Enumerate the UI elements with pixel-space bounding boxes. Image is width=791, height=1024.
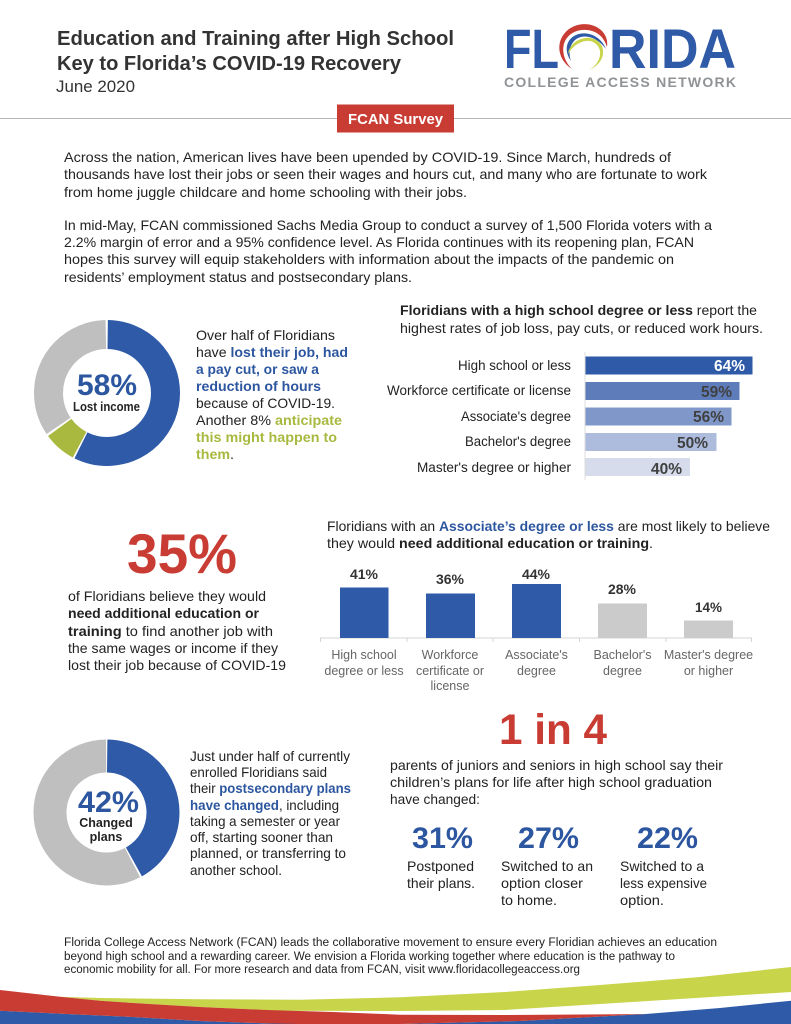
column: associate's 44%: degree	[517, 664, 556, 678]
heading: need for additional education: they would need additional education or training .	[327, 535, 653, 551]
horizontal bar chart: job loss by education	[387, 352, 752, 480]
text: over half of Floridians: have lost their job, had	[196, 344, 348, 360]
column: bachelor's 28%	[594, 581, 651, 678]
column: workforce 36%: Workforce	[422, 648, 478, 662]
bar: master's degree 40%	[417, 458, 690, 478]
column: master's 14%	[664, 599, 753, 678]
donut chart: 42% changed plans: 42%	[78, 786, 139, 819]
stat: 22% less expensive	[620, 822, 707, 908]
footer swoosh	[0, 967, 791, 1024]
stat: 31% postponed: 31%	[412, 822, 473, 855]
bar: associate's degree 56%: 56%	[693, 409, 724, 426]
bar: high school or less 64%: High school or less	[458, 358, 571, 373]
column: associate's 44%: Associate's	[505, 648, 568, 662]
bar: bachelor's degree 50%	[465, 433, 716, 452]
stat: 22% less expensive: 22%	[637, 822, 698, 855]
column chart: need for additional education	[320, 566, 753, 693]
column: master's 14%: Master's degree	[664, 648, 753, 662]
column: high school 41%: degree or less	[324, 664, 404, 678]
bar: master's degree 40%: 40%	[651, 461, 682, 478]
stat: 27% closer to home: 27%	[518, 822, 579, 855]
column: high school 41%: 41%	[350, 566, 379, 582]
badge: FCAN Survey	[337, 104, 454, 132]
stat: 22% less expensive: less expensive	[620, 875, 707, 891]
stat: 35%: 35%	[127, 522, 237, 585]
heading: job loss by education: highest rates of job loss, pay cuts, or reduced work hours.	[400, 320, 763, 336]
text: 35% description: lost their job because of COVID-19	[68, 657, 286, 673]
bar: associate's degree 56%	[461, 408, 732, 426]
donut chart: 58% lost income: 58%	[77, 369, 137, 402]
intro paragraph 2	[64, 217, 712, 285]
donut chart: 58% lost income: Lost income	[73, 400, 140, 414]
stat: 31% postponed	[407, 822, 475, 891]
column: workforce 36%: certificate or	[416, 664, 484, 678]
donut chart: 42% changed plans	[50, 756, 163, 869]
title: Key to Florida’s COVID-19 Recovery	[57, 53, 402, 75]
bar: high school or less 64%: 64%	[714, 358, 745, 375]
column: high school 41%	[324, 566, 404, 678]
column: high school 41%: High school	[331, 648, 397, 662]
text: parents of juniors and seniors: children’s plans for life after high school graduation	[390, 774, 712, 790]
logo: Florida College Access Network: COLLEGE ACCESS NETWORK	[504, 74, 736, 90]
text: postsecondary plans: planned, or transferring to	[190, 845, 346, 861]
bar: workforce certificate 59%	[387, 382, 740, 401]
bar: workforce certificate 59%: Workforce certificate or license	[387, 383, 571, 398]
text: postsecondary plans: enrolled Floridians said	[190, 764, 327, 780]
text: postsecondary plans: their postsecondary plans	[190, 780, 351, 796]
bar: bachelor's degree 50%: Bachelor's degree	[465, 434, 571, 449]
text: postsecondary plans: taking a semester or year	[190, 813, 340, 829]
text: postsecondary plans: have changed, including	[190, 797, 339, 813]
intro paragraph 1: thousands have lost their jobs or seen their wages and hours cut, and many who are fortunate to work	[64, 166, 708, 182]
logo: Florida College Access Network: FL	[504, 17, 559, 80]
heading: job loss by education: Floridians with a high school degree or less report the	[400, 302, 757, 318]
intro paragraph 1	[64, 149, 708, 200]
column: associate's 44%: 44%	[522, 566, 551, 582]
stat: 27% closer to home: option closer	[501, 875, 583, 891]
column: bachelor's 28%: 28%	[608, 581, 637, 597]
title: Education and Training after High School	[57, 28, 454, 50]
intro paragraph 2: residents’ employment status and postsecondary plans.	[64, 269, 412, 285]
bar: associate's degree 56%: Associate's degree	[461, 409, 571, 424]
intro paragraph 1: Across the nation, American lives have been upended by COVID-19. Since March, hundreds of	[64, 149, 671, 165]
intro paragraph 2: In mid-May, FCAN commissioned Sachs Media Group to conduct a survey of 1,500 Florida voters with a	[64, 217, 712, 233]
bar: bachelor's degree 50%: 50%	[677, 435, 708, 452]
title: June 2020	[56, 77, 135, 96]
text: over half of Floridians: this might happen to	[196, 429, 337, 445]
column: bachelor's 28%: degree	[603, 664, 642, 678]
bar: workforce certificate 59%: 59%	[701, 384, 732, 401]
donut chart: 58% lost income	[48, 334, 166, 452]
column: workforce 36%: license	[431, 679, 469, 693]
donut chart: 42% changed plans: plans	[90, 830, 122, 844]
text: postsecondary plans: Just under half of currently	[190, 748, 350, 764]
column: workforce 36%: 36%	[436, 571, 465, 587]
text: 35% description: need additional education or	[68, 605, 260, 621]
text: over half of Floridians: reduction of hours	[196, 378, 321, 394]
text: over half of Floridians: them.	[196, 446, 234, 462]
logo: Florida College Access Network: RIDA	[609, 17, 736, 80]
column: master's 14%: or higher	[684, 664, 733, 678]
footer text: beyond high school and a rewarding career. We envision a Florida working together where education is the pathway to	[64, 951, 675, 963]
column: associate's 44%	[505, 566, 568, 678]
heading: need for additional education	[327, 518, 770, 551]
stat: 31% postponed: their plans.	[407, 875, 475, 891]
stat: 27% closer to home: Switched to an	[501, 858, 593, 874]
heading: job loss by education	[400, 302, 763, 336]
stat: 27% closer to home: to home.	[501, 892, 557, 908]
stat: 22% less expensive: Switched to a	[620, 858, 704, 874]
column: master's 14%: 14%	[695, 599, 723, 615]
column: workforce 36%	[416, 571, 484, 693]
text: parents of juniors and seniors: have changed:	[390, 791, 480, 807]
donut chart: 42% changed plans: Changed	[79, 816, 133, 830]
text: over half of Floridians: Over half of Floridians	[196, 327, 335, 343]
bar: master's degree 40%: Master's degree or higher	[417, 460, 572, 475]
text: postsecondary plans	[190, 748, 351, 878]
footer text: Florida College Access Network (FCAN) leads the collaborative movement to ensure every Floridian achieves an education	[64, 937, 717, 949]
text: over half of Floridians: Another 8% anticipate	[196, 412, 342, 428]
text: postsecondary plans: off, starting sooner than	[190, 829, 333, 845]
text: 35% description	[68, 588, 286, 673]
stat: 1 in 4: 1 in 4	[499, 706, 607, 754]
footer text	[64, 937, 717, 976]
text: over half of Floridians: because of COVID-19.	[196, 395, 335, 411]
intro paragraph 2: hopes this survey will equip stakeholders with information about the impacts of the pandemic on	[64, 251, 674, 267]
stat: 22% less expensive: option.	[620, 892, 664, 908]
stat: 31% postponed: Postponed	[407, 858, 474, 874]
intro paragraph 2: 2.2% margin of error and a 95% confidence level. As Florida continues with its reopening plan, FCAN	[64, 234, 694, 250]
text: over half of Floridians	[196, 327, 348, 462]
title	[56, 28, 454, 96]
footer text: economic mobility for all. For more research and data from FCAN, visit www.floridacollegeaccess.org	[64, 964, 580, 976]
text: parents of juniors and seniors	[390, 757, 723, 807]
bar: high school or less 64%	[458, 356, 752, 375]
text: postsecondary plans: another school.	[190, 862, 282, 878]
logo: Florida College Access Network	[504, 17, 736, 90]
text: over half of Floridians: a pay cut, or saw a	[196, 361, 319, 377]
text: 35% description: training to find another job with	[68, 623, 273, 639]
text: parents of juniors and seniors: parents of juniors and seniors in high school say their	[390, 757, 723, 773]
badge: FCAN Survey: FCAN Survey	[348, 111, 444, 128]
heading: need for additional education: Floridians with an Associate’s degree or less are most likely to believe	[327, 518, 770, 534]
column: bachelor's 28%: Bachelor's	[594, 648, 651, 662]
intro paragraph 1: from home juggle childcare and home schooling with their jobs.	[64, 184, 467, 200]
text: 35% description: the same wages or income if they	[68, 640, 278, 656]
stat: 27% closer to home	[501, 822, 593, 908]
text: 35% description: of Floridians believe they would	[68, 588, 266, 604]
